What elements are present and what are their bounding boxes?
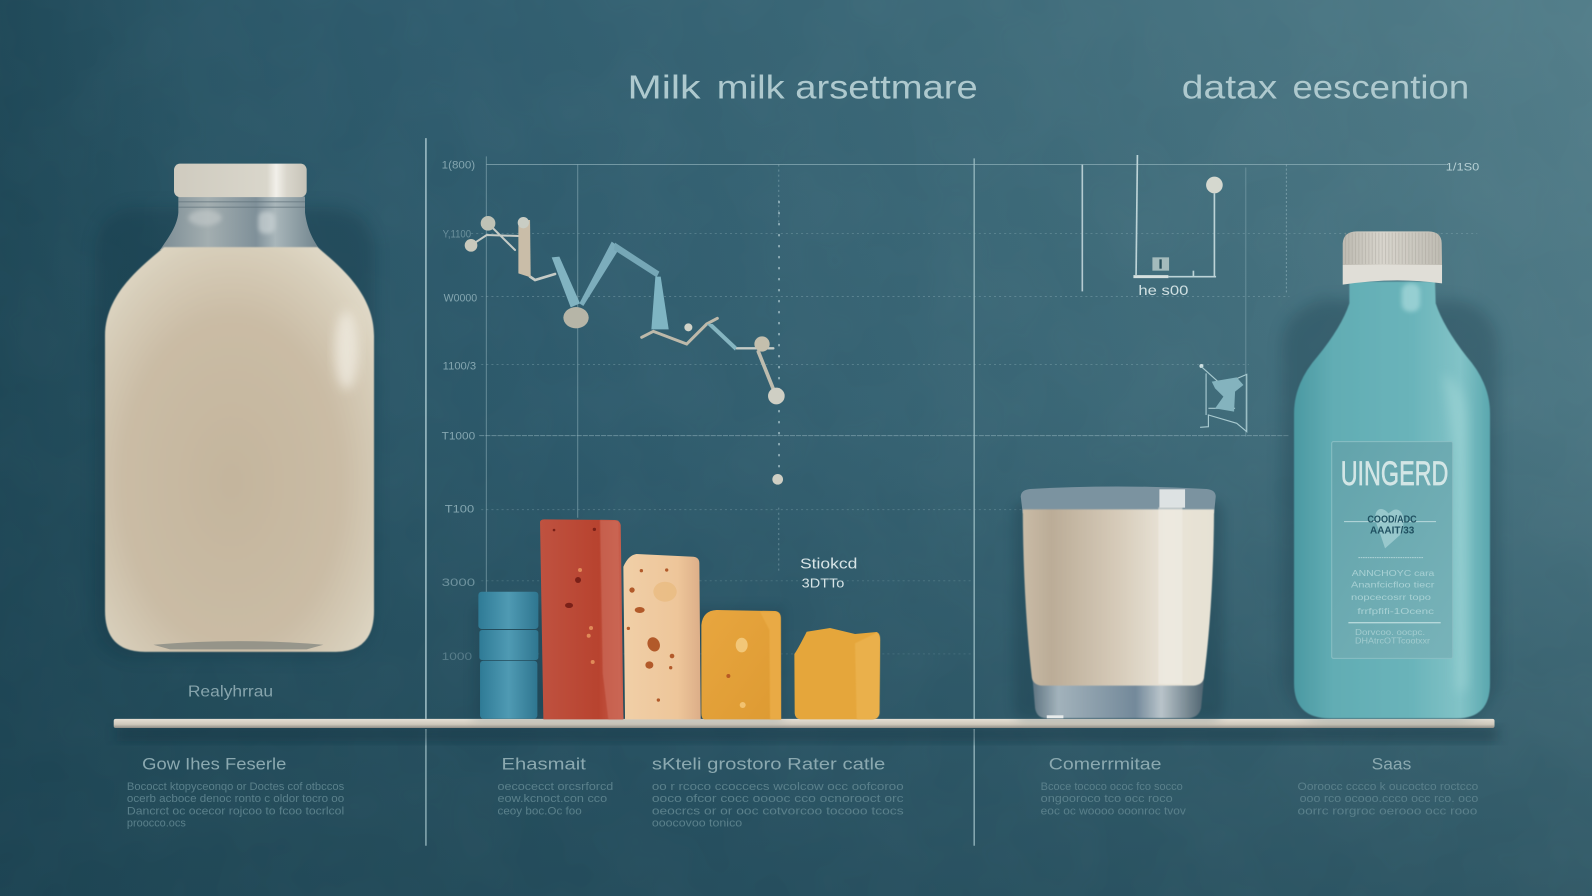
orange bar [701,610,781,719]
bottle label [1332,442,1453,658]
footer column 1: proocco.ocs [127,817,186,829]
bottle label: DHAtrcOTTcootxxr [1355,636,1430,645]
bottle label: UINGERD [1341,455,1448,493]
bottle label: frrfpfifi-1Ocenc [1357,606,1434,616]
bar annotation: Stiokcd [800,556,857,572]
footer column 5: oorrc rorgroc oerooo occ rooo [1298,805,1477,817]
axis labels: 1100/3 [443,361,476,373]
footer column 3 [652,755,904,829]
footer column 3: ooco ofcor cocc ooooc cco ocnorooct orc [652,793,904,805]
footer column 2: eow.kcnoct.con cco [498,793,607,805]
title left: milk arsettmare [717,69,978,106]
bottle label: COOD/ADC [1367,515,1417,526]
title left: Milk [627,69,701,106]
line chart [465,202,785,487]
footer column 4: Bcoce tococo ococ fco socco [1041,781,1183,793]
title left [627,69,978,106]
red bar [540,519,623,719]
footer column 4: ongooroco tco occ roco [1041,793,1173,805]
footer column 4: Comerrmitae [1049,755,1162,774]
footer column 1: Dancrct oc ocecor rojcoo to fcoo tocrlcol [127,805,344,817]
title right [1182,69,1469,106]
footer column 2: oecocecct orcsrforcd [498,781,613,793]
small bar chart top right: he s00 [1138,282,1189,298]
axis labels: 1/1S0 [1446,162,1479,174]
footer column 5: Saas [1372,755,1411,774]
bottle label: ANNCHOYC cara [1352,568,1435,578]
footer column 2: Ehasmait [502,755,586,774]
bottle label: Dorvcoo. oocpc. [1355,628,1425,637]
footer column 2 [498,755,613,817]
footer column 4: eoc oc woooo ooonroc tvov [1041,805,1187,817]
footer column 5: Ooroocc cccco k oucoctco roctcco [1298,781,1478,793]
glass of milk [1013,486,1223,720]
bottle label: nopcecosrr topo [1351,592,1432,602]
beige bar [623,554,701,719]
footer column 1 [127,755,344,829]
bar annotation: 3DTTo [802,576,844,590]
axis labels: W0000 [444,293,477,305]
blue stacked bar [478,592,538,719]
axis labels: 1(800) [442,160,475,172]
footer column 2: ceoy boc.Oc foo [498,805,582,817]
cheese bars [473,519,880,720]
right teal bottle [1282,231,1498,720]
title right: eescention [1292,69,1469,106]
footer column 4 [1041,755,1187,817]
axis labels: Y,1100 [443,229,471,241]
yellow bar [794,628,880,719]
footer column 3: sKteli grostoro Rater catle [652,755,885,774]
footer column 5 [1298,755,1478,817]
axis labels [442,160,1479,663]
title right: datax [1182,69,1278,106]
axis labels: 3000 [442,577,475,589]
shelf [114,719,1498,741]
bar annotation [800,556,857,590]
footer column 5: ooo rco ocooo.ccco occ rco. oco [1300,793,1478,805]
axis labels: T100 [445,504,474,516]
footer column 3: oo r rcoco ccoccecs wcolcow occ oofcoroo [652,781,904,793]
bottle body [1294,282,1490,718]
axis labels: T1000 [442,431,475,443]
footer column 3: oeocrcs or or ooc cotvorcoo tocooo tcocs [652,805,904,817]
small schematic icon [1199,364,1247,432]
bottle label: AAAIT/33 [1370,525,1415,536]
axis labels: 1000 [442,651,472,663]
footer column 1: Bococct ktopyceonqo or Doctes cof otbccos [127,781,344,793]
footer column 1: Gow Ihes Feserle [142,755,286,774]
footer column 3: ooocovoo tonico [652,817,742,829]
footer column 1: ocerb acboce denoc ronto c oldor tocro oo [127,793,344,805]
small bar chart top right [1133,155,1223,298]
bottle label: Ananfcicfloo tiecr [1351,580,1435,590]
bottle cap [1343,231,1442,285]
left milk bottle [95,164,375,657]
chart grid and axes [426,138,1477,846]
left bottle label: Realyhrrau [188,683,273,700]
